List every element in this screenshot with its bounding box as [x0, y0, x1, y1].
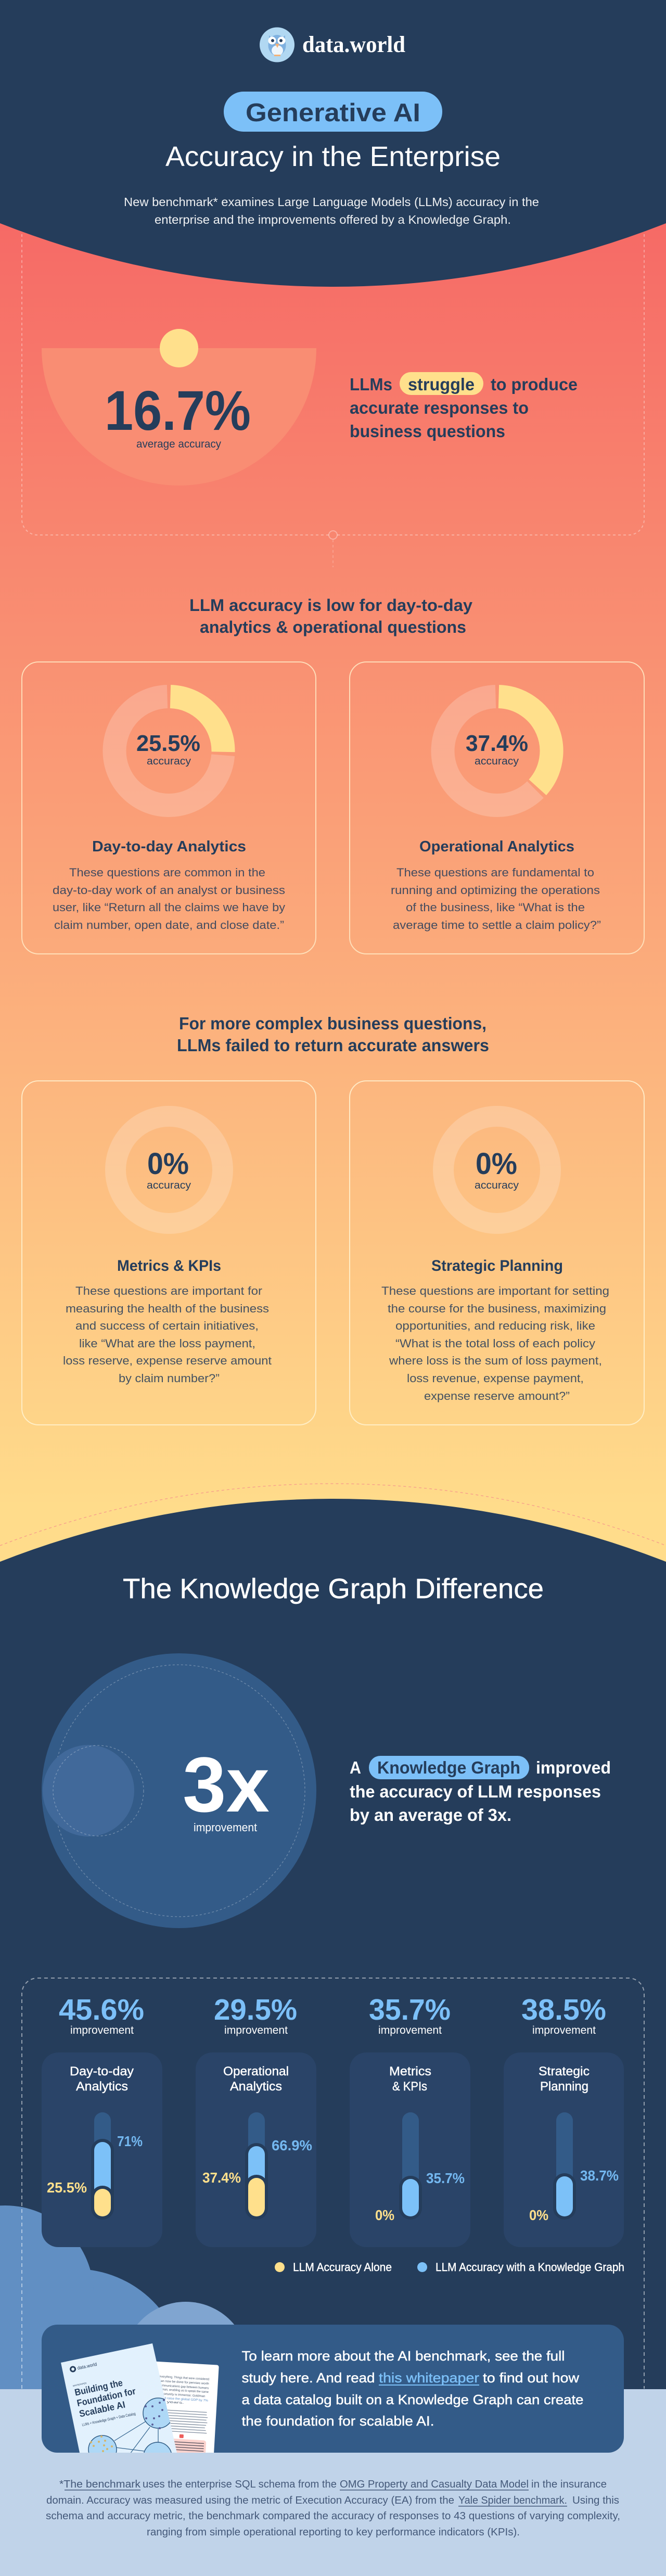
card description: day-to-day work of an analyst or business — [53, 884, 285, 897]
back page: can now be done for pennies worth — [159, 2380, 209, 2386]
card description: opportunities, and reducing risk, like — [395, 1319, 595, 1332]
donut chart: 25.5% — [114, 697, 223, 805]
call to action text — [241, 2348, 584, 2429]
bar: 25.5% to 71%: 25.5% — [47, 2179, 87, 2196]
card title: Operational Analytics — [419, 838, 574, 855]
back page: everything. Things that were considered — [159, 2375, 209, 2381]
improvement column: Metrics: 35.7% — [369, 1993, 451, 2026]
call to action text: study here. And read — [241, 2370, 375, 2386]
title: Accuracy in the Enterprise — [165, 141, 501, 172]
intro text — [124, 195, 539, 226]
card description: by claim number?” — [119, 1372, 220, 1385]
card description: and success of certain initiatives, — [75, 1319, 259, 1332]
call to action text: the foundation for scalable AI. — [241, 2413, 434, 2429]
back page: could raise the global GDP by 7% — [158, 2396, 209, 2403]
heading: The Knowledge Graph Difference: The Knowledge Graph Difference — [123, 1573, 544, 1604]
heading: day-to-day and operational — [189, 596, 472, 636]
panel: Strategic Planning — [350, 1081, 644, 1425]
legend: LLM Accuracy with a Knowledge Graph — [436, 2261, 624, 2274]
footnote: ranging from simple operational reporting to key performance indicators (KPIs). — [147, 2527, 520, 2538]
improvement column: Metrics: improvement — [378, 2024, 442, 2036]
footnote: uses the enterprise SQL schema from the — [143, 2479, 337, 2490]
footnote: Using this — [572, 2495, 619, 2506]
statement: Knowledge Graph improved accuracy: the accuracy of LLM responses — [350, 1782, 601, 1801]
decorative cloud shapes — [0, 2205, 249, 2488]
logo: data.world owl — [260, 27, 405, 62]
back page: communications gap between humans — [159, 2384, 209, 2390]
donut chart: 25.5%: accuracy — [147, 756, 191, 767]
panel: Day-to-day Analytics — [22, 662, 316, 954]
footnote: in the insurance — [531, 2479, 607, 2490]
card description: “What is the total loss of each policy — [395, 1337, 596, 1350]
card title: Day-to-day Analytics — [92, 838, 246, 855]
intro text: enterprise and the improvements offered by a Knowledge Graph. — [155, 213, 511, 226]
front page text — [70, 2362, 136, 2426]
bar: 37.4% to 66.9% — [202, 2112, 312, 2220]
stat: 16.7% average accuracy — [42, 329, 316, 486]
card description: measuring the health of the business — [66, 1302, 269, 1315]
donut chart: 25.5%: 25.5% — [136, 731, 200, 756]
improvement column: Metrics: Metrics — [389, 2064, 431, 2078]
front page text: data.world — [77, 2362, 97, 2370]
donut chart: 0%: 0% — [147, 1147, 189, 1181]
legend — [275, 2261, 624, 2274]
back page: human, enabling us to speak the same — [159, 2388, 209, 2394]
statement: LLMs struggle: business questions — [350, 422, 505, 441]
statement: Knowledge Graph improved accuracy — [350, 1756, 611, 1825]
card description — [53, 866, 286, 932]
pill: Generative AI — [224, 92, 442, 132]
footnote: Yale Spider benchmark. — [458, 2495, 567, 2506]
stat: 16.7% average accuracy: 16.7% — [105, 379, 251, 442]
bar: 0% to 35.7%: 0% — [375, 2207, 394, 2223]
heading: day-to-day and operational: LLM accuracy is low for day-to-day — [189, 596, 472, 615]
stat: 16.7% average accuracy: average accuracy — [136, 438, 221, 450]
card description: running and optimizing the operations — [391, 884, 600, 897]
improvement column: Operational: 29.5% — [214, 1993, 297, 2026]
logo wordmark: data.world — [302, 32, 405, 57]
back page: opportunity is immense: Goldman — [158, 2392, 205, 2398]
bar: 0% to 38.7%: 0% — [529, 2207, 548, 2223]
legend: LLM Accuracy Alone — [293, 2261, 392, 2274]
heading: day-to-day and operational: analytics & operational questions — [200, 618, 466, 636]
footnote — [46, 2479, 620, 2538]
heading: complex business questions — [177, 1014, 489, 1055]
statement: LLMs struggle: LLMs — [350, 375, 392, 394]
improvement column: Day-to-day: Analytics — [76, 2080, 128, 2094]
front page — [61, 2343, 177, 2453]
stat circle: 3x improvement: improvement — [194, 1821, 257, 1834]
heading: complex business questions: For more complex business questions, — [179, 1014, 486, 1033]
statement: Knowledge Graph improved accuracy: Knowledge Graph — [377, 1758, 520, 1777]
card description: expense reserve amount?” — [424, 1389, 570, 1402]
statement: LLMs struggle — [350, 372, 578, 441]
improvement column: Operational: Operational — [223, 2064, 289, 2078]
card description: These questions are common in the — [69, 866, 265, 879]
card description — [381, 1284, 609, 1402]
improvement column: Strategic: Planning — [540, 2080, 588, 2094]
warm gradient background — [0, 0, 666, 1613]
bar: 0% to 38.7% — [529, 2112, 619, 2223]
improvement column: Strategic — [504, 1993, 624, 2247]
card description: loss reserve, expense reserve amount — [63, 1354, 272, 1367]
call to action panel — [42, 2325, 624, 2453]
donut chart: 0% — [443, 1116, 550, 1223]
improvement column: Operational: improvement — [224, 2024, 288, 2036]
donut chart: 0%: accuracy — [475, 1180, 519, 1191]
bar: 25.5% to 71%: 71% — [117, 2133, 143, 2149]
statement: Knowledge Graph improved accuracy: improved — [536, 1758, 611, 1777]
bar: 0% to 35.7%: 35.7% — [426, 2170, 465, 2186]
statement: LLMs struggle: struggle — [408, 375, 475, 394]
improvement column: Strategic: Strategic — [539, 2064, 590, 2078]
call to action text: a data catalog built on a Knowledge Graph can create — [241, 2392, 584, 2407]
improvement column: Day-to-day: 45.6% — [59, 1993, 144, 2026]
bar: 0% to 35.7% — [375, 2112, 465, 2223]
card description: These questions are important for setting — [381, 1284, 609, 1297]
improvement column: Day-to-day — [42, 1993, 162, 2247]
front page text: LLMs + Knowledge Graph + Data Catalog — [82, 2411, 136, 2427]
statement: Knowledge Graph improved accuracy: A — [350, 1758, 361, 1777]
bar: 0% to 38.7%: 38.7% — [580, 2167, 619, 2184]
improvement column: Metrics — [350, 1993, 470, 2247]
card description: the course for the business, maximizing — [388, 1302, 606, 1315]
call to action text: this whitepaper — [379, 2370, 479, 2386]
intro text: New benchmark* examines Large Language Models (LLMs) accuracy in the — [124, 195, 539, 209]
improvement column: Operational: Analytics — [230, 2080, 282, 2094]
donut chart: 0%: accuracy — [147, 1180, 191, 1191]
donut chart: 0%: 0% — [476, 1147, 517, 1181]
dashed frame around headline stat — [22, 219, 644, 567]
statement: Knowledge Graph improved accuracy: by an average of 3x. — [350, 1805, 511, 1825]
bar: 25.5% to 71% — [47, 2112, 143, 2220]
card title: Metrics & KPIs — [117, 1257, 221, 1274]
front page text: Foundation for — [76, 2386, 137, 2408]
footnote: schema and accuracy metric, the benchmark compared the accuracy of responses to 43 questions of varying complexity, — [46, 2510, 620, 2522]
card description: like “What are the loss payment, — [79, 1337, 255, 1350]
card description: These questions are important for — [75, 1284, 263, 1297]
card description — [391, 866, 601, 932]
improvement column: Operational — [196, 1993, 316, 2247]
improvement column: Metrics: & KPIs — [392, 2080, 427, 2094]
donut chart: 37.4%: 37.4% — [466, 731, 528, 756]
header panel — [0, 0, 666, 287]
donut chart: 37.4% — [443, 697, 552, 805]
illustration: whitepaper pages — [61, 2343, 219, 2453]
card description: of the business, like “What is the — [406, 901, 585, 914]
card description — [63, 1284, 272, 1385]
bar: 37.4% to 66.9%: 37.4% — [202, 2170, 241, 2186]
donut chart: 37.4%: accuracy — [475, 756, 519, 767]
stat circle: 3x improvement — [42, 1653, 316, 1928]
card title: Strategic Planning — [431, 1257, 563, 1274]
footnote: domain. Accuracy was measured using the metric of Execution Accuracy (EA) from the — [46, 2495, 454, 2506]
call to action text: to find out how — [483, 2370, 579, 2386]
card description: user, like “Return all the claims we have by — [53, 901, 286, 914]
light footer background — [0, 2389, 666, 2576]
call to action text: To learn more about the AI benchmark, see the full — [241, 2348, 565, 2364]
back page: 10 years. — [158, 2400, 184, 2405]
front page text: WHITEPAPER — [72, 2382, 87, 2387]
improvement column: Day-to-day: improvement — [70, 2024, 134, 2036]
back page — [156, 2362, 219, 2453]
donut chart: 0% — [116, 1116, 223, 1223]
statement: LLMs struggle: to produce — [491, 375, 578, 394]
card description: claim number, open date, and close date.” — [54, 919, 284, 932]
statement: LLMs struggle: accurate responses to — [350, 398, 529, 417]
card description: loss revenue, expense payment, — [407, 1372, 584, 1385]
improvement column: Day-to-day: Day-to-day — [70, 2064, 134, 2078]
improvement column: Strategic: 38.5% — [521, 1993, 606, 2026]
navy section background — [0, 1499, 666, 2394]
heading: complex business questions: LLMs failed to return accurate answers — [177, 1036, 489, 1055]
pill: Generative AI: Generative AI — [246, 99, 420, 127]
panel: Operational Analytics — [350, 662, 644, 954]
footnote: *The benchmark — [59, 2479, 141, 2490]
bar: 37.4% to 66.9%: 66.9% — [272, 2137, 312, 2153]
front page text: Building the — [74, 2377, 124, 2398]
improvement column: Strategic: improvement — [532, 2024, 596, 2036]
card description: These questions are fundamental to — [396, 866, 594, 879]
stat circle: 3x improvement: 3x — [183, 1741, 270, 1828]
card description: average time to settle a claim policy?” — [393, 919, 601, 932]
card description: where loss is the sum of loss payment, — [389, 1354, 602, 1367]
panel: Metrics & KPIs — [22, 1081, 316, 1425]
front page text: Scalable AI — [78, 2399, 126, 2419]
footnote: OMG Property and Casualty Data Model — [340, 2479, 529, 2490]
